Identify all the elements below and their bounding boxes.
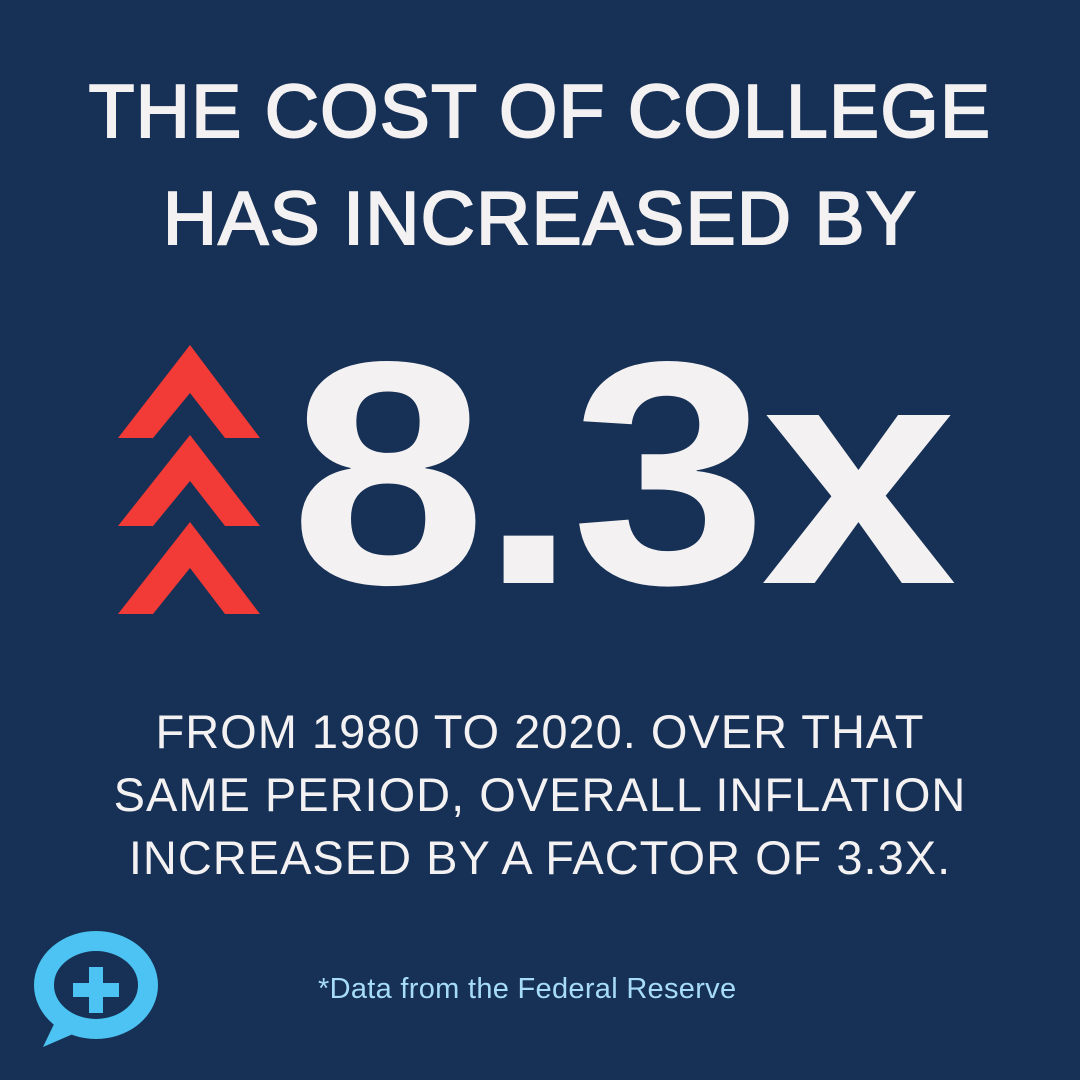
body text: SAME PERIOD, OVERALL INFLATION xyxy=(114,768,966,821)
title: THE COST OF COLLEGE xyxy=(89,69,991,153)
logo: speech bubble plus xyxy=(34,931,158,1047)
body text: FROM 1980 TO 2020. OVER THAT xyxy=(156,705,924,758)
title xyxy=(89,69,991,260)
body text: INCREASED BY A FACTOR OF 3.3X. xyxy=(129,831,951,884)
footnote: *Data from the Federal Reserve xyxy=(318,973,736,1005)
title: HAS INCREASED BY xyxy=(163,176,917,260)
big number: 8.3x xyxy=(290,296,950,651)
body text xyxy=(114,705,966,884)
